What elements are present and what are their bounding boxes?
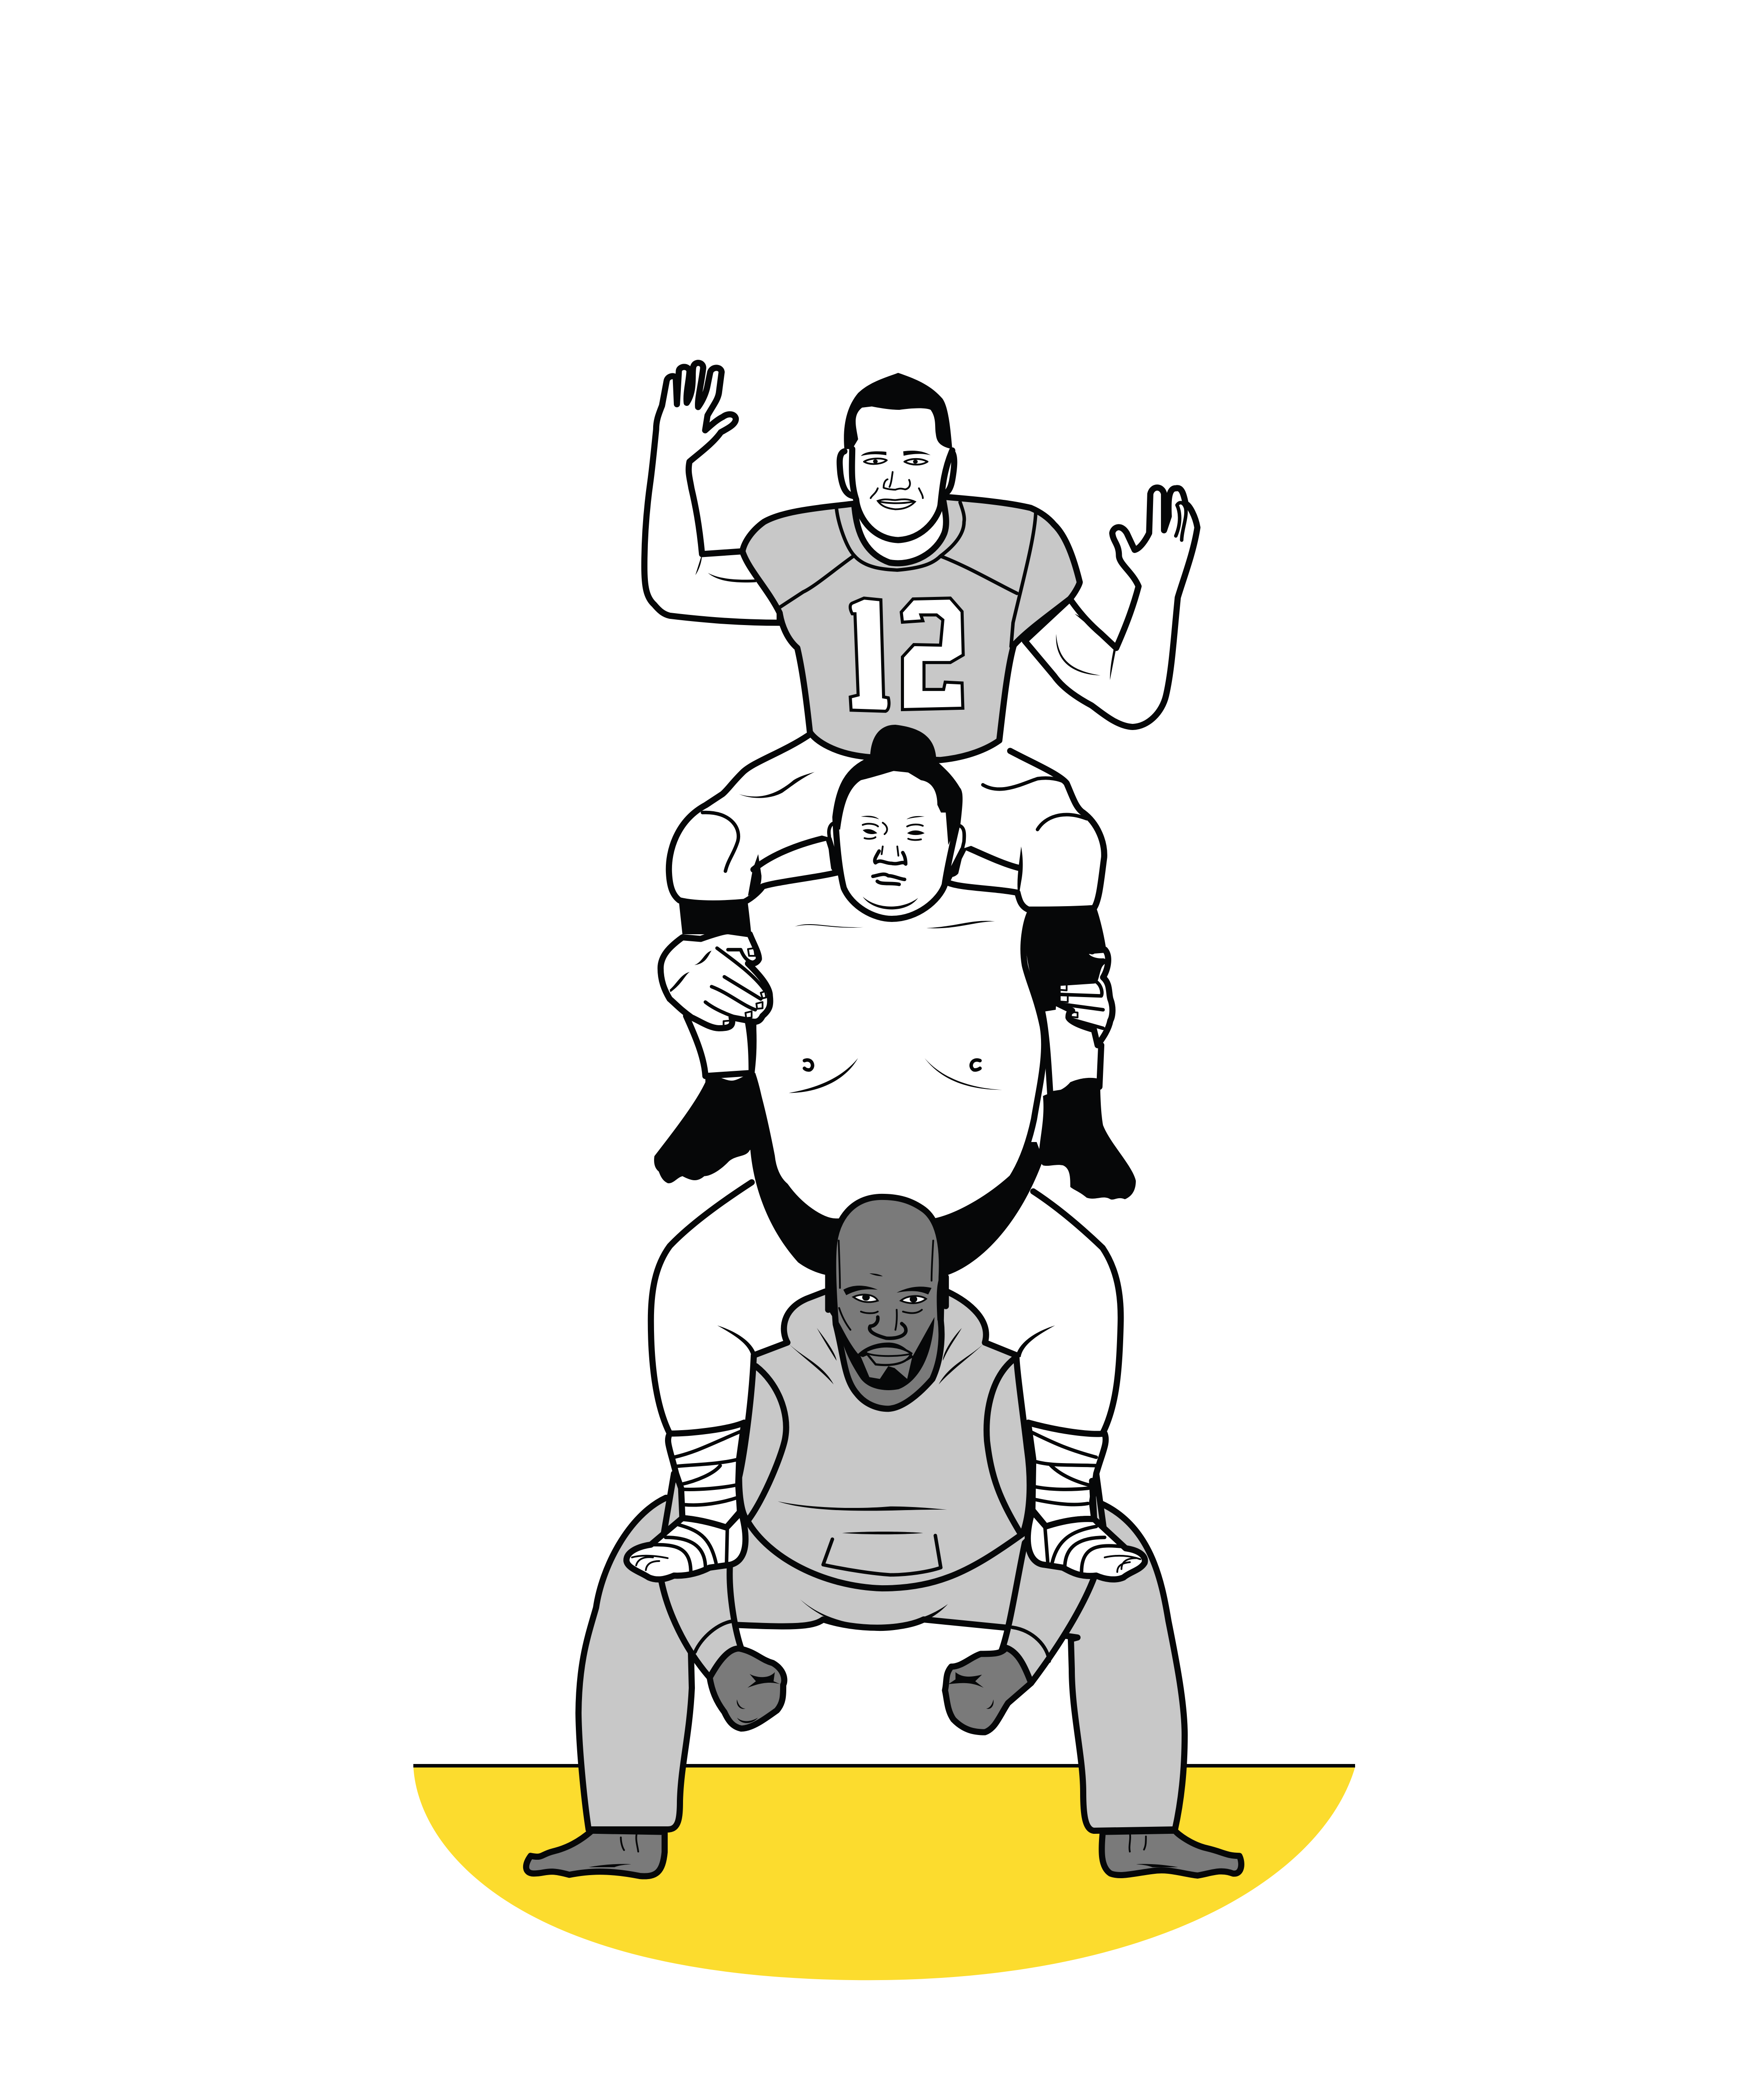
white football pants: [669, 736, 839, 904]
raised left-side arm and hand: [644, 363, 780, 623]
clenched fists: [710, 1648, 784, 1728]
sumo belly: [745, 902, 1044, 1222]
jersey: [742, 497, 1080, 760]
ears: [840, 451, 954, 496]
hoodie seams and pocket: [748, 1357, 1021, 1534]
left bandaged shin: [668, 1423, 744, 1528]
jersey number 12: [850, 598, 963, 711]
right foot: [1028, 1511, 1145, 1580]
nose and forehead lines: [870, 1317, 906, 1338]
arms with sleeves: [662, 1474, 741, 1677]
mawashi belt: [750, 1142, 1043, 1276]
football cleats: [654, 1073, 767, 1183]
chest details: [789, 921, 1002, 1093]
hoodie body: [739, 1291, 1030, 1588]
sumo wrestler head and hands: [661, 725, 1113, 1045]
right bandaged shin: [1028, 1423, 1106, 1526]
sumo wrestler lower body: thighs, mawashi and belly: [651, 902, 1121, 1434]
ears: [828, 1277, 944, 1321]
black arm sleeves: [679, 900, 748, 934]
sumo face: [835, 760, 959, 919]
hair: [844, 373, 952, 449]
mouth: [865, 1346, 911, 1365]
facial features: [861, 451, 931, 456]
sumo shins and feet with bandages: [626, 1423, 1145, 1580]
bare feet: [526, 1831, 1241, 1876]
sumo hair: [835, 760, 961, 845]
sumo topknot bun: [870, 725, 936, 765]
sumo right-side hand gripping sleeve: [1058, 950, 1113, 1045]
sumo facial features: [861, 816, 925, 819]
neck: [854, 495, 946, 563]
shoulder creases on sumo thighs: [717, 1326, 1055, 1357]
sumo left-side hand gripping shin: [661, 931, 770, 1028]
bald head with beard: [828, 1275, 946, 1310]
face: [852, 408, 952, 539]
bottom man in hoodie: [526, 1197, 1241, 1876]
sumo ears: [829, 823, 964, 875]
yellow ground semicircle: [413, 1764, 1356, 1980]
left foot: [626, 1512, 745, 1580]
raised right-side arm and hand: [1025, 488, 1197, 727]
jersey seams and collar: [780, 502, 1036, 647]
grey pants: [578, 1498, 1185, 1831]
beard: [838, 1317, 934, 1390]
shins: [686, 1016, 752, 1076]
brows and eyes: [843, 1286, 932, 1295]
quarterback number 12: [644, 363, 1197, 1200]
sumo thighs: [651, 1182, 1121, 1434]
